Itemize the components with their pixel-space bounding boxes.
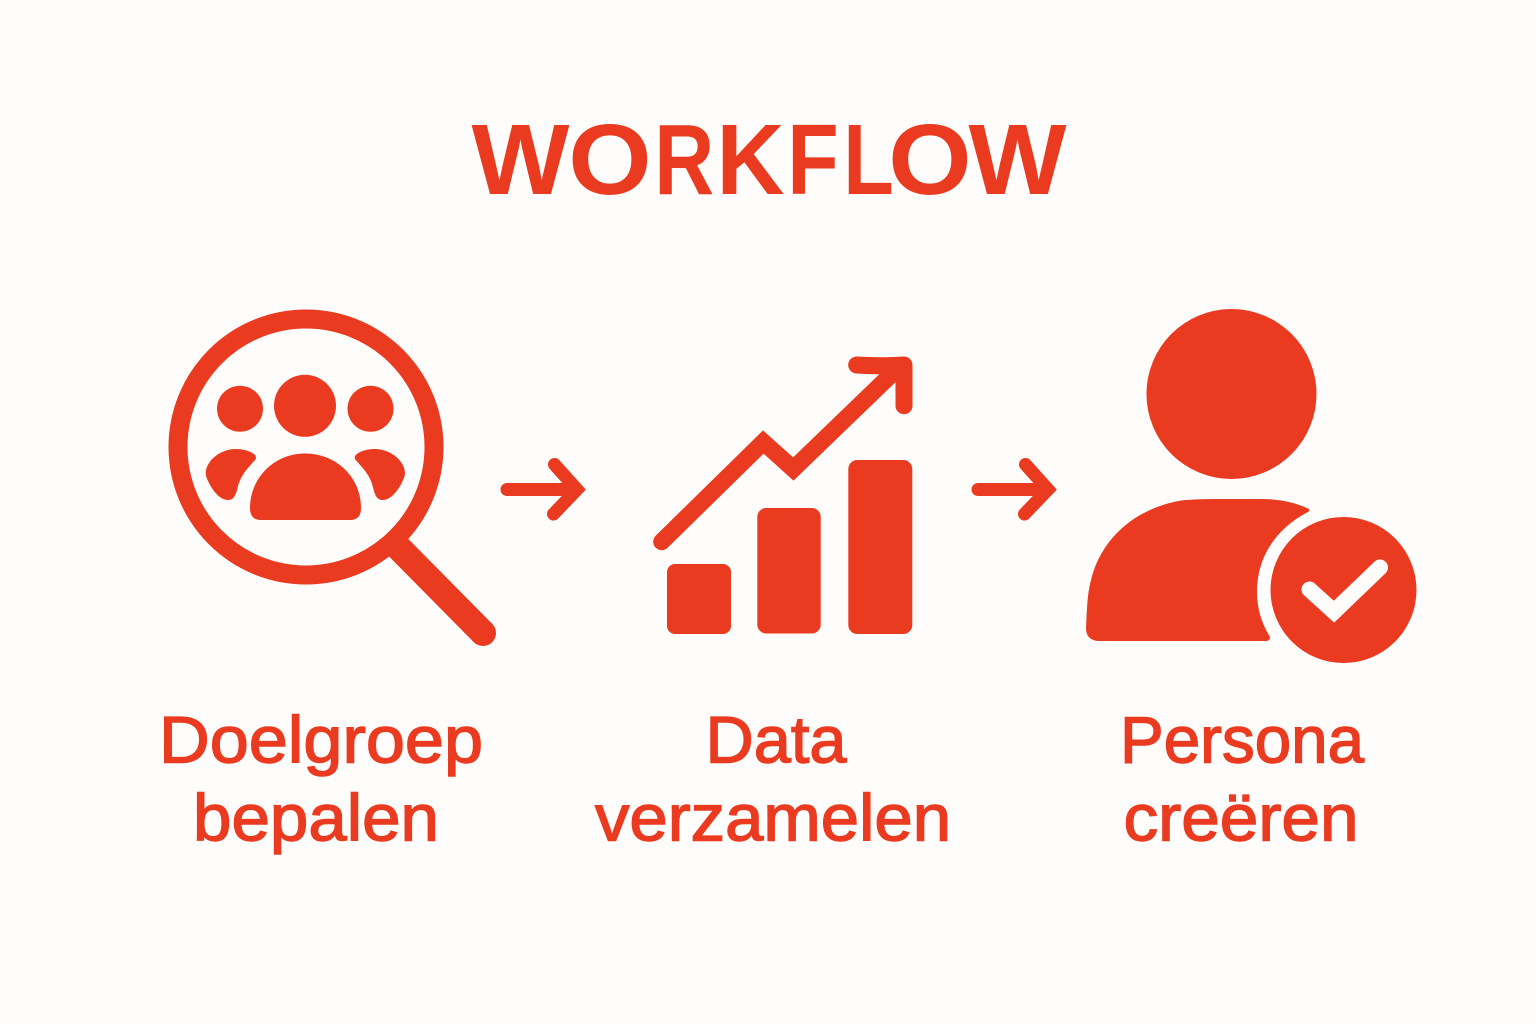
- head: [1146, 309, 1316, 479]
- label: Data verzamelen: [595, 702, 951, 854]
- title: W: [472, 104, 570, 216]
- icon: rising bar chart: [662, 365, 912, 634]
- title: K: [716, 104, 784, 216]
- label: Doelgroep bepalen: bepalen: [193, 780, 439, 854]
- label: Persona creëren: [1120, 702, 1364, 854]
- bar small: [667, 564, 731, 634]
- shoulders: [1086, 499, 1309, 641]
- icon: magnifying glass with people: [178, 319, 496, 646]
- title: O: [568, 104, 652, 216]
- arrow: step 2 to step 3: [978, 464, 1048, 514]
- label: Doelgroep bepalen: Doelgroep: [159, 702, 483, 776]
- title: [472, 104, 1067, 216]
- trend arrow: [662, 365, 904, 542]
- label: Data verzamelen: verzamelen: [595, 780, 951, 854]
- title: W: [968, 104, 1067, 216]
- title: R: [654, 104, 714, 216]
- title: F: [787, 104, 839, 216]
- label: Persona creëren: creëren: [1124, 780, 1358, 854]
- arrow: step 1 to step 2: [507, 464, 577, 514]
- bar medium: [757, 508, 821, 634]
- title: L: [843, 104, 894, 216]
- bar large: [848, 460, 912, 634]
- icon: persona with check badge: [1086, 309, 1416, 663]
- label: Persona creëren: Persona: [1120, 702, 1364, 776]
- label: Data verzamelen: Data: [706, 702, 847, 776]
- title: O: [888, 104, 972, 216]
- label: Doelgroep bepalen: [159, 702, 483, 854]
- check badge: [1270, 517, 1416, 663]
